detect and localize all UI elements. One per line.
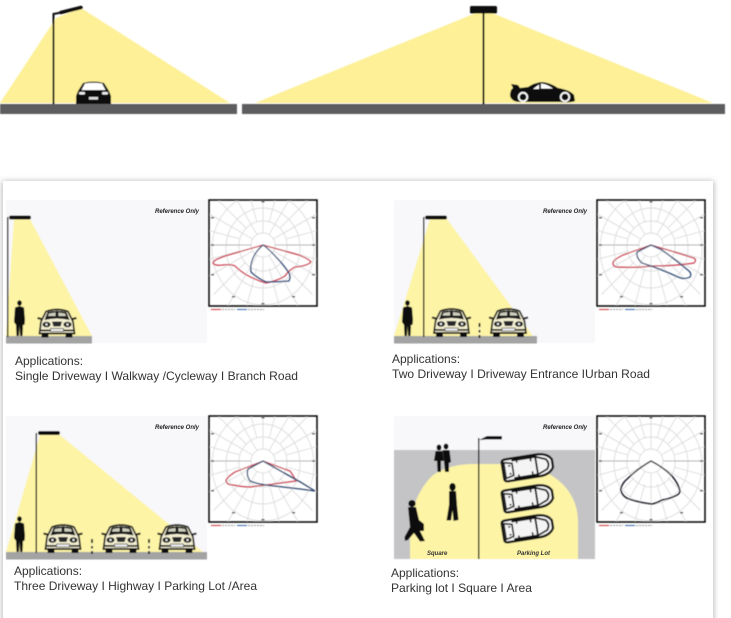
scene background	[6, 416, 207, 559]
icon: car two	[102, 525, 140, 553]
light pool	[410, 464, 578, 559]
application caption	[14, 564, 257, 593]
lamp head	[470, 6, 497, 14]
scene	[6, 200, 207, 344]
icon: parked car three	[501, 513, 554, 543]
icon: car	[38, 310, 76, 338]
application caption: Applications:	[392, 352, 460, 366]
application caption	[391, 566, 532, 595]
polar chart	[583, 391, 719, 531]
polar chart	[583, 175, 719, 315]
application caption: Applications:	[391, 566, 459, 580]
lamp pole	[423, 217, 424, 337]
icon: sports car	[510, 82, 575, 102]
application caption	[15, 354, 298, 383]
curve: red distribution	[613, 245, 696, 267]
scene	[6, 416, 207, 560]
application caption: Single Driveway I Walkway /Cycleway I Branch Road	[15, 369, 298, 383]
lamp pole	[482, 12, 484, 104]
panel: two driveway	[392, 175, 719, 381]
polar chart	[195, 175, 331, 315]
scene background	[394, 200, 595, 343]
icon: car two	[489, 309, 528, 337]
scene background	[6, 200, 207, 343]
application caption: Two Driveway I Driveway Entrance IUrban Road	[392, 367, 650, 381]
icon: car three	[158, 525, 196, 553]
light cone	[255, 13, 713, 103]
pavement	[394, 450, 595, 559]
icon: standing person	[446, 483, 458, 521]
icon: pedestrian	[14, 516, 25, 552]
light cone	[394, 219, 533, 336]
icon: parked car one	[501, 452, 554, 482]
scene background	[394, 416, 595, 559]
scene	[394, 416, 595, 559]
road	[242, 104, 725, 114]
light cone	[6, 219, 92, 336]
application caption: Three Driveway I Highway I Parking Lot /Area	[14, 579, 257, 593]
icon: car one	[432, 309, 471, 337]
label: square: Square	[427, 551, 448, 557]
polar chart	[195, 391, 331, 531]
icon: walking person	[404, 500, 425, 542]
top diagram: double-sided road lighting	[242, 6, 725, 114]
label: parking lot: Parking Lot	[517, 551, 551, 557]
curve: symmetric distribution	[621, 461, 680, 504]
lamp head	[38, 431, 60, 435]
lamp pole	[36, 433, 37, 553]
light cone	[6, 435, 203, 552]
road	[6, 552, 207, 560]
icon: car front	[76, 82, 111, 104]
icon: pedestrian	[402, 300, 413, 336]
icon: car one	[44, 525, 82, 553]
curve: red distribution	[226, 461, 296, 487]
lamp head	[9, 216, 31, 220]
icon: couple	[434, 444, 451, 472]
curve: red distribution	[213, 245, 311, 283]
curve: blue distribution	[247, 461, 315, 491]
main panel shadow	[2, 181, 714, 618]
lamp pole	[54, 12, 64, 104]
reference note: Reference Only	[543, 209, 588, 215]
icon: bollard	[478, 323, 480, 338]
icon: pedestrian	[14, 300, 25, 336]
lamp head	[61, 8, 81, 12]
lamp head	[425, 216, 447, 220]
icon: bollard one	[91, 539, 93, 554]
lamp pole	[7, 217, 8, 337]
road	[0, 104, 237, 114]
application caption	[392, 352, 650, 381]
main panel	[3, 175, 719, 618]
reference note: Reference Only	[155, 209, 200, 215]
curve: blue distribution	[637, 245, 691, 278]
lamp pole	[478, 438, 480, 559]
icon: bollard two	[148, 539, 150, 554]
reference note: Reference Only	[543, 425, 588, 431]
application caption: Applications:	[14, 564, 82, 578]
road	[6, 336, 92, 344]
panel: three driveway	[6, 391, 331, 593]
curve: blue distribution	[251, 245, 290, 282]
application caption: Applications:	[15, 354, 83, 368]
reference note: Reference Only	[155, 425, 200, 431]
lamp head	[479, 436, 502, 440]
panel: single driveway	[6, 175, 331, 383]
icon: parked car two	[501, 483, 554, 513]
top diagram: single-sided road lighting	[0, 8, 237, 114]
road	[394, 336, 537, 344]
application caption: Parking lot I Square I Area	[391, 581, 532, 595]
panel: parking lot and square	[391, 391, 719, 595]
scene	[394, 200, 595, 344]
light cone	[0, 8, 230, 103]
